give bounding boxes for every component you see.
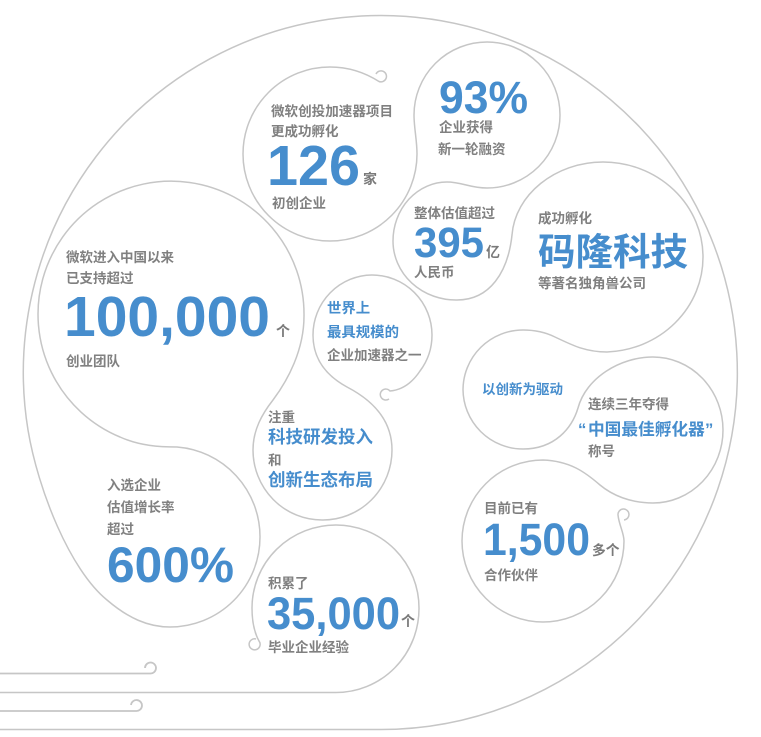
- panel: Malong Technologies: 码隆科技: [538, 231, 688, 273]
- decorative line with curl, upper: [0, 663, 156, 674]
- panel: 395 valuation: [414, 205, 500, 280]
- outline: bubble 35,000 with trailing line: [0, 525, 419, 692]
- panel: 100,000 teams: 个: [276, 323, 290, 339]
- panel: 93%: 企业获得: [439, 119, 493, 135]
- panel: 100,000 teams: 微软进入中国以来: [66, 249, 174, 265]
- panel: 395 valuation: 亿: [486, 244, 500, 260]
- panel: 126 startups: 更成功孵化: [271, 123, 339, 139]
- panel: largest accelerators: 企业加速器之一: [327, 347, 422, 363]
- panel: best incubator award: 称号: [588, 444, 615, 459]
- panel: research and ecosystem: 注重: [268, 409, 295, 425]
- panel: 100,000 teams: 100,000: [64, 285, 270, 349]
- outline: connected bubbles at top and right: [243, 42, 723, 622]
- panel: 35,000 experience: 个: [401, 613, 415, 629]
- panel: 100,000 teams: 创业团队: [66, 353, 120, 369]
- panel: 1,500 partners: 目前已有: [484, 500, 538, 516]
- panel: 1,500 partners: [483, 500, 620, 583]
- panel: best incubator award: ”: [705, 420, 713, 439]
- panel: 1,500 partners: 合作伙伴: [484, 567, 538, 583]
- panel: best incubator award: 中国最佳孵化器: [588, 419, 705, 439]
- panel: largest accelerators: 世界上: [327, 300, 370, 317]
- panel: largest accelerators: 最具规模的: [327, 323, 399, 341]
- panel: 600% growth: 600%: [107, 537, 234, 593]
- panel: 600% growth: 估值增长率: [107, 499, 174, 515]
- panel: 126 startups: 初创企业: [272, 195, 326, 211]
- panel: 93%: 新一轮融资: [438, 141, 506, 157]
- panel: 126 startups: [267, 103, 393, 211]
- panel: largest accelerators: [327, 300, 422, 363]
- panel: 600% growth: [107, 477, 234, 593]
- panel: 1,500 partners: 多个: [592, 542, 620, 558]
- panel: Malong Technologies: [538, 210, 688, 291]
- panel: 395 valuation: 整体估值超过: [414, 205, 495, 221]
- panel: 126 startups: 126: [267, 134, 360, 198]
- panel: 126 startups: 家: [363, 171, 377, 187]
- panel: best incubator award: [578, 396, 713, 459]
- panel: 1,500 partners: 1,500: [483, 514, 590, 565]
- panel: 93%: 93%: [439, 72, 528, 123]
- panel: 395 valuation: 人民币: [414, 265, 454, 280]
- panel: Malong Technologies: 成功孵化: [538, 210, 592, 226]
- panel: research and ecosystem: 创新生态布局: [268, 470, 373, 490]
- panel: 100,000 teams: [64, 249, 290, 369]
- panel: 100,000 teams: 已支持超过: [66, 270, 134, 286]
- panel: 35,000 experience: 35,000: [267, 588, 400, 639]
- panel: research and ecosystem: [268, 409, 373, 490]
- panel: 600% growth: 超过: [107, 522, 134, 537]
- panel: research and ecosystem: 科技研发投入: [268, 427, 373, 447]
- panel: 35,000 experience: [267, 576, 415, 655]
- panel: 93%: [438, 72, 528, 157]
- panel: 600% growth: 入选企业: [107, 477, 161, 493]
- panel: best incubator award: 连续三年夺得: [588, 396, 669, 412]
- panel: research and ecosystem: 和: [268, 453, 282, 468]
- panel: 395 valuation: 395: [414, 219, 484, 267]
- panel: Malong Technologies: 等著名独角兽公司: [538, 275, 646, 291]
- panel: 35,000 experience: 毕业企业经验: [268, 639, 349, 655]
- panel: 126 startups: 微软创投加速器项目: [271, 103, 393, 119]
- panel: innovation driven: 以创新为驱动: [482, 381, 563, 397]
- decorative line with curl, lower: [0, 700, 142, 711]
- panel: best incubator award: “: [578, 420, 586, 439]
- panel: 35,000 experience: 积累了: [268, 576, 308, 591]
